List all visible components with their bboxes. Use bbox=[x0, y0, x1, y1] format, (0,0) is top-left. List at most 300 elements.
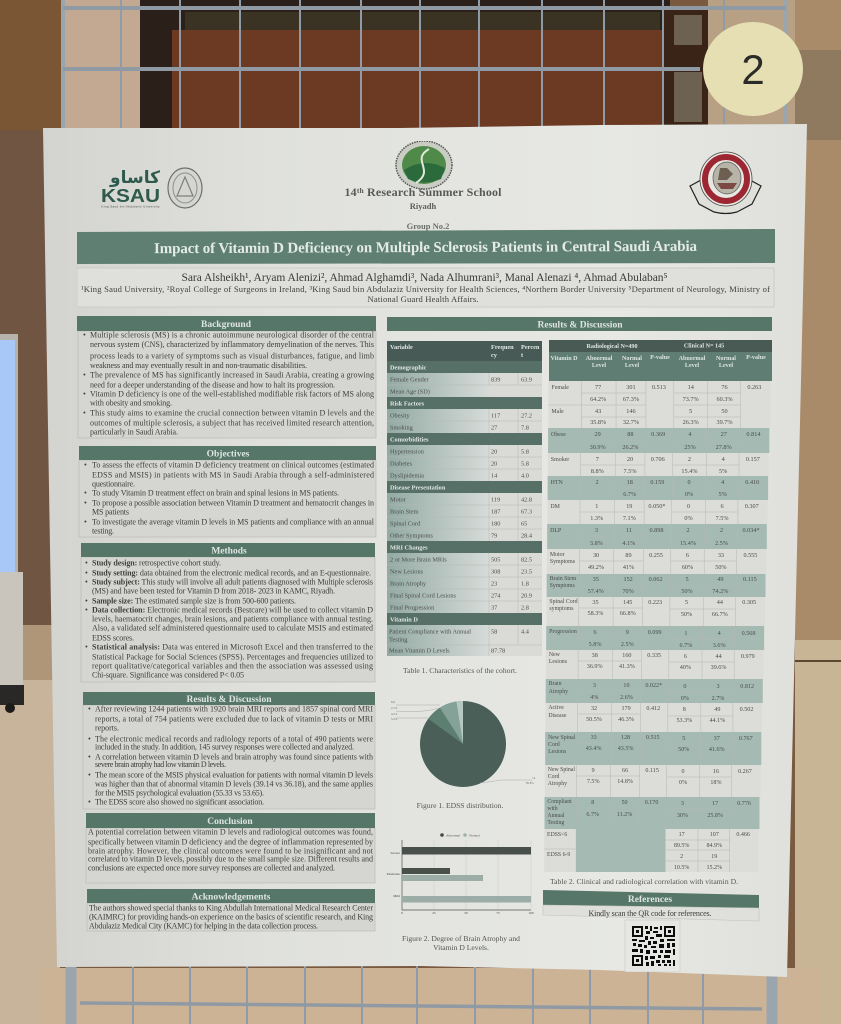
row: brain stem symptoms: 152 bbox=[623, 576, 633, 583]
row: smoker: Smoker bbox=[551, 457, 569, 463]
table 1: characteristics of the cohort: Female Gender bbox=[390, 376, 430, 384]
row: motor symptoms: 49.2% bbox=[588, 564, 604, 571]
rows: female and male bbox=[548, 381, 770, 428]
row: new spinal cord lesions: Cord bbox=[548, 742, 560, 748]
table 1: characteristics of the cohort: 67.3 bbox=[521, 508, 532, 516]
row: active disease: 49 bbox=[714, 706, 720, 713]
rows: EDSS bbox=[544, 829, 759, 872]
row: brain atrophy: 0.812 bbox=[740, 683, 754, 690]
heading: background bbox=[77, 316, 376, 331]
row: brain stem symptoms: 35 bbox=[593, 576, 599, 583]
panel: results and discussion (left) bbox=[83, 692, 375, 809]
table 1: characteristics of the cohort: 23 bbox=[491, 580, 497, 588]
text: objectives bullets: MS patients bbox=[92, 508, 129, 516]
text: background bullets: Vitamin D deficiency is one of the well-established modifiable risk factors of MS along bbox=[90, 390, 374, 398]
text: methods bullets: Chi-square. Significance was considered P< 0.05 bbox=[92, 670, 244, 680]
table 1: characteristics of the cohort: Smoking bbox=[390, 424, 414, 432]
heading: methods: Methods bbox=[211, 546, 247, 556]
row: motor symptoms: 60% bbox=[682, 564, 693, 571]
row: compliant with annual testing: Annual bbox=[547, 813, 565, 819]
text: conclusion: correlated to vitamin D levels, possibly due to the small sample size. Different results and bbox=[88, 854, 373, 864]
row: motor symptoms: 41% bbox=[623, 564, 634, 571]
row: DLP: 11 bbox=[626, 527, 632, 534]
row: motor symptoms: Symptoms bbox=[550, 559, 576, 565]
authors and affiliations: Sara Alsheikh¹, Aryam Alenizi², Ahmad Alghamdi³, Nada Alhumrani³, Manal Alenazi ⁴, Ahmad Abulaban⁵ bbox=[182, 272, 668, 284]
row: brain stem symptoms: Brain Stem bbox=[550, 576, 577, 582]
table 2 header: Level bbox=[592, 363, 606, 369]
table 1: characteristics of the cohort: 20.9 bbox=[521, 592, 532, 600]
row: smoker: 5% bbox=[719, 468, 727, 475]
text: methods bullets: • bbox=[85, 568, 88, 578]
row: brain stem symptoms: Symptoms bbox=[550, 583, 575, 589]
row: new spinal cord lesions: Lesions bbox=[548, 749, 567, 755]
row: spinal cord symptoms: 5 bbox=[685, 599, 688, 606]
row: brain atrophy: Atrophy bbox=[549, 689, 568, 695]
text: methods bullets: Data collection: Electronic medical records (Bestcare) will be used to collect vitamin D bbox=[92, 606, 373, 614]
text: background bullets: • bbox=[83, 330, 86, 340]
table 2 header: Level bbox=[719, 363, 733, 369]
row: compliant with annual testing: 0.776 bbox=[737, 800, 751, 807]
text: methods bullets: Study design: retrospective cohort study. bbox=[92, 558, 221, 568]
panel: objectives bbox=[79, 446, 376, 537]
row: new spinal cord atrophy: 0.115 bbox=[645, 767, 659, 774]
row: obese: 30.9% bbox=[590, 444, 606, 451]
row: spinal cord symptoms: 66.8% bbox=[620, 610, 636, 617]
row: new spinal cord atrophy: 7.5% bbox=[587, 778, 600, 785]
text: methods bullets: • bbox=[85, 596, 88, 606]
row: spinal cord symptoms: 145 bbox=[623, 599, 632, 606]
rows: EDSS: 19 bbox=[711, 854, 717, 860]
heading: references bbox=[543, 890, 759, 908]
row: HTN: 4 bbox=[721, 479, 725, 486]
rows: EDSS: 89.5% bbox=[674, 843, 689, 849]
row: DLP: DLP bbox=[550, 528, 562, 534]
row: progression: 5.8% bbox=[589, 641, 601, 648]
table 1: characteristics of the cohort: Risk Factors bbox=[390, 400, 425, 408]
row: active disease: 50.5% bbox=[586, 716, 602, 723]
table 1: characteristics of the cohort: 42.8 bbox=[521, 496, 532, 504]
table 1: characteristics of the cohort: Mean Age (SD) bbox=[390, 388, 430, 396]
rows: female and male: 76 bbox=[721, 384, 728, 391]
text: results bullets: The electronic medical records and radiology reports of a total of 490 patients were bbox=[95, 734, 373, 744]
rows: female and male: 5 bbox=[689, 408, 692, 415]
row: HTN: 0 bbox=[687, 479, 691, 486]
row: compliant with annual testing: 17 bbox=[712, 800, 718, 807]
text: background bullets: with obesity and smoking. bbox=[90, 398, 172, 408]
row: active disease: Disease bbox=[548, 713, 567, 719]
table 1: characteristics of the cohort: t bbox=[521, 352, 524, 359]
row: progression: 0.568 bbox=[742, 630, 755, 637]
row: DLP: 0.898 bbox=[649, 527, 663, 534]
row: brain stem symptoms bbox=[547, 574, 766, 597]
row: compliant with annual testing: 25.8% bbox=[707, 812, 723, 819]
row: progression: 6 bbox=[594, 629, 597, 636]
text: methods bullets: • bbox=[85, 578, 88, 586]
rows: female and male: 77 bbox=[595, 384, 601, 391]
table 2 header bbox=[549, 340, 772, 381]
row: new spinal cord atrophy: 18% bbox=[710, 779, 722, 786]
row: smoker: 0.706 bbox=[651, 456, 665, 463]
table 2 header: P-value bbox=[650, 355, 670, 361]
row: new lesions bbox=[546, 650, 763, 679]
row: DM: 7.1% bbox=[623, 515, 636, 522]
poster sheet bbox=[43, 124, 807, 977]
row: progression: 4 bbox=[718, 630, 722, 637]
caption: figure 2: Figure 2. Degree of Brain Atrophy and bbox=[402, 934, 520, 943]
row: new lesions: 0.335 bbox=[647, 652, 661, 659]
row: compliant with annual testing: 8 bbox=[591, 799, 594, 806]
heading: objectives bbox=[79, 446, 376, 460]
heading: results and discussion bbox=[83, 692, 375, 705]
text: methods bullets: • bbox=[85, 606, 88, 614]
table 2: clinical and radiological correlation bbox=[544, 340, 772, 872]
row: DM: 6 bbox=[721, 503, 724, 510]
text: results bullets: • bbox=[88, 752, 91, 762]
row: compliant with annual testing: Testing bbox=[547, 820, 564, 826]
text: background bullets: This study aims to examine the crucial connection between vitamin D levels and the bbox=[90, 408, 374, 418]
rows: female and male: 43 bbox=[595, 408, 601, 415]
table 1: characteristics of the cohort: 117 bbox=[491, 412, 500, 420]
heading: results and discussion: Results & Discussion bbox=[186, 695, 272, 705]
row: active disease: 53.3% bbox=[676, 717, 692, 724]
table 2 header: Normal bbox=[622, 356, 642, 362]
row: DLP: 4.1% bbox=[622, 540, 635, 547]
table 1: characteristics of the cohort: 27 bbox=[491, 424, 497, 432]
text: background bullets: • bbox=[83, 390, 86, 398]
row: active disease bbox=[545, 703, 762, 732]
row: obese: 29 bbox=[595, 431, 601, 438]
row: obese: 0.814 bbox=[746, 431, 761, 438]
row: smoker: 7.5% bbox=[624, 468, 637, 475]
table 1: characteristics of the cohort: Variable bbox=[390, 344, 413, 351]
chart: degree of brain atrophy bars: Severe bbox=[390, 851, 400, 855]
rows: female and male: 0.513 bbox=[652, 384, 666, 391]
table 1: characteristics of the cohort: 119 bbox=[491, 496, 500, 504]
text: methods bullets: Statistical analysis: Data was entered in Microsoft Excel and then transferred to the bbox=[92, 642, 373, 652]
rows: female and male: Female bbox=[551, 385, 569, 391]
text: results bullets: • bbox=[88, 704, 91, 714]
authors and affiliations: National Guard Health Affairs. bbox=[368, 294, 478, 304]
text: methods bullets: • bbox=[85, 642, 88, 652]
text: methods bullets: report qualitative/categorical variables and then the association was assessed using bbox=[92, 662, 373, 670]
row: DLP: 3 bbox=[595, 527, 598, 534]
row: obese: 25% bbox=[684, 444, 696, 451]
legend: Abnormal bbox=[446, 834, 460, 838]
text: objectives bullets: To investigate the average vitamin D levels in MS patients and compliance with an annual bbox=[92, 518, 375, 526]
chart: EDSS distribution pie bbox=[391, 700, 536, 787]
table 2 header: Abnormal bbox=[679, 356, 706, 362]
heading: conclusion: Conclusion bbox=[207, 817, 253, 827]
row: obese: 4 bbox=[688, 431, 692, 438]
authors and affiliations: ¹King Saud University, ²Royal College of Surgeons in Ireland, ³King Saud bin Abdulaziz University for Health Sciences, ⁴Northern Border University ⁵Department of Neurology, Ministry of bbox=[81, 284, 770, 294]
row: HTN: 6.7% bbox=[623, 491, 636, 498]
table 1: characteristics of the cohort: 37 bbox=[491, 604, 497, 612]
heading: school name: Group No.2 bbox=[407, 221, 449, 231]
row: active disease: 179 bbox=[621, 705, 631, 712]
text: objectives bullets: questionnaire. bbox=[92, 480, 135, 488]
text: results bullets: • bbox=[88, 734, 91, 744]
row: new lesions: New bbox=[549, 652, 561, 658]
table 1: characteristics of the cohort: 839 bbox=[491, 376, 500, 384]
rows: EDSS: EDSS 6-9 bbox=[547, 852, 570, 858]
logo: KSAU: King Saud bin Abdulaziz University bbox=[102, 204, 160, 208]
heading: school name: 14 bbox=[344, 185, 357, 199]
row: brain atrophy: 4% bbox=[590, 694, 598, 701]
text: results bullets: • bbox=[88, 770, 91, 780]
table 1: characteristics of the cohort: 187 bbox=[491, 508, 500, 516]
table 1: characteristics of the cohort: 5.8 bbox=[521, 460, 529, 468]
table 1: characteristics of the cohort: cy bbox=[491, 352, 498, 359]
caption: table 2: Table 2. Clinical and radiological correlation with vitamin D. bbox=[550, 877, 738, 886]
row: new spinal cord lesions: 43.5% bbox=[618, 745, 633, 752]
table 2 header: Level bbox=[625, 363, 639, 369]
panel: references bbox=[543, 890, 759, 921]
rows: female and male: 26.3% bbox=[683, 419, 699, 426]
text: conclusion: A potential correlation between vitamin D levels and radiological outcomes was found, bbox=[88, 828, 373, 836]
text: conclusion: specifically between vitamin D deficiency and the degree of inflammation represented by bbox=[88, 838, 373, 846]
heading: objectives: Objectives bbox=[207, 450, 250, 460]
text: methods bullets: Sample size: The estimated sample size is from 500-600 patients. bbox=[92, 596, 296, 606]
text: references note bbox=[543, 905, 759, 921]
row: new spinal cord atrophy: Cord bbox=[548, 774, 559, 780]
table 1: characteristics of the cohort: 28.4 bbox=[521, 532, 533, 540]
caption: figure 1: Figure 1. EDSS distribution. bbox=[417, 801, 503, 810]
row: new spinal cord lesions: 33 bbox=[591, 734, 597, 741]
row: DM: DM bbox=[550, 504, 561, 510]
table 1: characteristics of the cohort: Testing bbox=[389, 636, 408, 644]
text: results bullets: reports, a total of 754 patients were excluded due to lack of vitamin D tests or MRI bbox=[95, 714, 373, 724]
table 1: characteristics of the cohort: 5.8 bbox=[521, 448, 529, 456]
row: obese: 88 bbox=[627, 431, 634, 438]
text: background bullets: The prevalence of MS has significantly increased in Saudi Arabia, creating a growing bbox=[90, 370, 374, 380]
row: new spinal cord lesions: 5 bbox=[682, 735, 685, 742]
table 1: characteristics of the cohort: 2 or More Brain MRIs bbox=[390, 556, 447, 564]
row: compliant with annual testing: 6.7% bbox=[586, 811, 599, 818]
row: motor symptoms: 6 bbox=[686, 552, 689, 559]
left edge kiosk screen bbox=[0, 334, 24, 713]
row: progression: 6.7% bbox=[680, 642, 692, 649]
table 1: characteristics of the cohort: Percen bbox=[521, 344, 540, 351]
row: smoker: 0.157 bbox=[746, 456, 760, 463]
row: brain stem symptoms: 74.2% bbox=[712, 588, 728, 595]
row: active disease: 32 bbox=[591, 705, 597, 712]
row: smoker: 4 bbox=[722, 456, 726, 463]
chart: degree of brain atrophy bars: 50 bbox=[464, 911, 468, 915]
panel: background bbox=[77, 316, 376, 438]
row: active disease: 8 bbox=[683, 706, 686, 713]
row: new spinal cord atrophy: 14.8% bbox=[617, 778, 633, 785]
row: new lesions: 40% bbox=[680, 664, 691, 671]
title banner bbox=[77, 229, 775, 264]
rows: EDSS: 84.9% bbox=[707, 843, 722, 849]
text: references note: Kindly scan the QR code for references. bbox=[588, 909, 712, 918]
heading: conclusion bbox=[86, 813, 375, 828]
text: conclusion: brain atrophy. However, the clinical outcomes were found to be insignificant and not bbox=[88, 846, 374, 856]
rows: female and male: 60.3% bbox=[716, 396, 733, 403]
row: brain atrophy bbox=[546, 679, 763, 703]
row: DM: 0% bbox=[684, 515, 693, 522]
row: brain atrophy: 10 bbox=[623, 682, 630, 689]
text: results bullets: for the MSIS psychological evaluation (55.33 vs 53.65). bbox=[95, 788, 264, 798]
row: new spinal cord atrophy: 66 bbox=[622, 767, 628, 774]
row: brain atrophy: 3 bbox=[716, 683, 720, 690]
table 1: characteristics of the cohort: 58 bbox=[491, 628, 497, 636]
row: brain stem symptoms: 50% bbox=[681, 588, 693, 595]
row: spinal cord symptoms: Spinal Cord bbox=[549, 599, 578, 605]
rows: EDSS: EDSS<6 bbox=[547, 832, 567, 838]
row: new spinal cord lesions: 0.515 bbox=[646, 734, 660, 741]
row: smoker: 20 bbox=[627, 456, 633, 463]
row: new spinal cord lesions: 50% bbox=[678, 746, 689, 753]
text: results bullets: The mean score of the MSIS physical evaluation for patients with normal vitamin D levels bbox=[95, 770, 373, 780]
rows: EDSS: 0.466 bbox=[736, 832, 750, 838]
row: spinal cord symptoms: 66.7% bbox=[712, 611, 728, 618]
row: DM bbox=[547, 500, 768, 524]
chart: degree of brain atrophy bars: Moderate bbox=[387, 872, 400, 876]
rows: female and male: 301 bbox=[626, 384, 636, 391]
row: new lesions: 44 bbox=[715, 653, 723, 660]
rows: EDSS: 17 bbox=[679, 832, 685, 838]
text: methods bullets: Study subject: This study will involve all adult patients diagnosed with Multiple sclerosis bbox=[92, 578, 373, 586]
text: objectives bullets: EDSS and MSIS) in patients with MS in Saudi Arabia through a self-administered bbox=[92, 470, 374, 480]
row: motor symptoms: Motor bbox=[550, 552, 565, 558]
text: conclusion bbox=[88, 828, 374, 872]
text: methods bullets: Statistical Package for Social Sciences (SPSS). Percentages and frequencies utilized to bbox=[92, 652, 373, 662]
rows: female and male: 39.7% bbox=[716, 419, 733, 426]
text: background bullets: • bbox=[83, 370, 86, 380]
QR code bbox=[625, 920, 680, 972]
row: motor symptoms: 0.255 bbox=[649, 552, 663, 559]
chart: degree of brain atrophy bars: 25 bbox=[432, 911, 436, 915]
table 1: characteristics of the cohort: Demographic bbox=[390, 364, 427, 372]
heading: acknowledgements bbox=[87, 889, 375, 903]
text: background bullets: particularly in Saudi Arabia. bbox=[90, 428, 178, 436]
row: progression: Progression bbox=[549, 629, 577, 635]
heading: results and discussion (right): Results & Discussion bbox=[538, 320, 623, 330]
rows: female and male: 50 bbox=[721, 408, 728, 415]
text: background bullets: Multiple sclerosis (MS) is a chronic autoimmune neurological disorder of the central bbox=[90, 330, 375, 340]
row: brain stem symptoms: 0.115 bbox=[743, 576, 757, 583]
table 1: characteristics of the cohort: 4.4 bbox=[521, 628, 530, 636]
row: compliant with annual testing bbox=[545, 797, 760, 829]
row: active disease: 46.3% bbox=[618, 716, 634, 723]
row: brain atrophy: 3 bbox=[593, 682, 596, 689]
text: acknowledgements: Abdulaziz Medical City (KAMC) for helping in the data collection process. bbox=[89, 922, 318, 930]
row: obese: Obese bbox=[551, 432, 566, 438]
panel: methods bbox=[81, 543, 375, 682]
table 1: characteristics of the cohort: Spinal Cord bbox=[390, 520, 421, 528]
table 1: characteristics of the cohort: Brain Stem bbox=[390, 508, 419, 516]
chart: EDSS distribution pie: 2.1% bbox=[391, 706, 398, 710]
authors and affiliations bbox=[77, 268, 774, 307]
row: new spinal cord atrophy: 0 bbox=[682, 768, 685, 775]
row: obese: 27.8% bbox=[716, 444, 732, 451]
row: motor symptoms: 89 bbox=[625, 552, 632, 559]
row: new lesions: 160 bbox=[622, 652, 631, 659]
text: conclusion: conclusions are expected once more survey responses are collected and analyzed. bbox=[88, 864, 335, 872]
row: new lesions: 39.6% bbox=[711, 664, 727, 671]
row: HTN: 0.410 bbox=[745, 479, 759, 486]
heading: school name: Riyadh bbox=[410, 201, 436, 211]
table 1: characteristics of the cohort: MRI Changes bbox=[390, 544, 428, 552]
row: smoker: 8.8% bbox=[591, 468, 604, 475]
chart: EDSS distribution pie: 6-9 bbox=[391, 700, 395, 704]
rows: EDSS: 15.2% bbox=[707, 865, 722, 871]
chart: EDSS distribution pie: 4-5.5 bbox=[391, 712, 398, 716]
chart: degree of brain atrophy bars: 100 bbox=[528, 911, 534, 915]
row: new spinal cord atrophy: 16 bbox=[713, 768, 719, 775]
text: background bullets: weakness and may eventually result in and non-traumatic disabilities. bbox=[90, 361, 307, 370]
row: brain atrophy: Brain bbox=[549, 681, 562, 687]
row: new lesions: 0.979 bbox=[741, 653, 755, 660]
row: active disease: 0.502 bbox=[740, 706, 753, 713]
chart: degree of brain atrophy bars: Mild bbox=[393, 894, 400, 898]
row: DM: 1 bbox=[595, 503, 598, 510]
row: HTN: 5% bbox=[718, 491, 727, 498]
table 1: characteristics of the cohort: 79 bbox=[491, 532, 497, 540]
row: spinal cord symptoms: 50% bbox=[681, 611, 692, 618]
row: brain stem symptoms: 5 bbox=[685, 576, 689, 583]
row: active disease: Active bbox=[548, 705, 564, 711]
row: new lesions: 6 bbox=[684, 653, 687, 660]
table 1: characteristics of the cohort: 7.8 bbox=[521, 424, 529, 432]
row: new lesions: 36.9% bbox=[587, 663, 603, 670]
row: spinal cord symptoms: 58.3% bbox=[587, 610, 603, 617]
table 1: characteristics of the cohort bbox=[387, 341, 542, 656]
row: DLP: 2.5% bbox=[715, 540, 728, 547]
rows: female and male: 64.2% bbox=[590, 396, 606, 403]
row: new spinal cord atrophy bbox=[545, 765, 760, 797]
table 2 header: Radiological N=490 bbox=[586, 344, 638, 350]
row: spinal cord symptoms: 0.305 bbox=[742, 599, 756, 606]
text: background bullets: nervous system (CNS), characterized by inflammatory demyelination of the nerves. This bbox=[90, 340, 374, 349]
text: results bullets: The EDSS score also showed no significant association. bbox=[95, 798, 264, 806]
row: spinal cord symptoms: 44 bbox=[717, 599, 724, 606]
text: objectives bullets: • bbox=[84, 518, 87, 526]
row: DLP: 3.8% bbox=[590, 540, 603, 547]
poster content bbox=[77, 141, 775, 972]
text: objectives bullets: • bbox=[84, 498, 87, 508]
chart: EDSS distribution pie: <4 bbox=[532, 776, 536, 780]
row: DM: 0 bbox=[687, 503, 690, 510]
logo: national guard health affairs bbox=[690, 152, 761, 214]
row: obese bbox=[548, 428, 769, 453]
caption: figure 2: Vitamin D Levels. bbox=[433, 943, 489, 952]
rows: female and male: 32.7% bbox=[623, 419, 639, 426]
text: methods bullets: levels, haematocrit changes, brain lesions, and patients compliance with annual testing. bbox=[92, 614, 373, 624]
row: HTN: 0% bbox=[685, 491, 693, 498]
row: DM: 0.050* bbox=[648, 503, 665, 510]
row: new spinal cord lesions: 43.4% bbox=[586, 745, 601, 752]
row: active disease: 44.1% bbox=[709, 717, 725, 724]
table 1: characteristics of the cohort: Dyslipidemia bbox=[390, 472, 424, 480]
text: background bullets: process leads to a variety of symptoms such as visual disturbances, fatigue, and limb bbox=[90, 352, 374, 360]
chart: degree of brain atrophy bars: 0 bbox=[401, 911, 403, 915]
text: methods bullets: EDSS scores. bbox=[92, 634, 134, 642]
table 1: characteristics of the cohort: 82.5 bbox=[521, 556, 532, 564]
row: brain stem symptoms: 57.4% bbox=[588, 588, 604, 595]
rows: female and male: 35.8% bbox=[590, 419, 606, 426]
row: motor symptoms: 33 bbox=[718, 552, 724, 559]
caption: figure 2 bbox=[402, 934, 520, 952]
rows: EDSS: 107 bbox=[710, 832, 719, 838]
row: new spinal cord lesions: 41.6% bbox=[709, 746, 725, 753]
row: progression: 9 bbox=[626, 629, 629, 636]
table 1: characteristics of the cohort: 4.0 bbox=[521, 472, 529, 480]
text: methods bullets: Study setting: data obtained from the electronic medical records, and an E-questionnaire. bbox=[92, 568, 371, 578]
text: results bullets: included in the study. In addition, 145 survey responses were collected and analyzed. bbox=[95, 742, 354, 752]
table 1: characteristics of the cohort: Comorbidities bbox=[390, 436, 429, 444]
